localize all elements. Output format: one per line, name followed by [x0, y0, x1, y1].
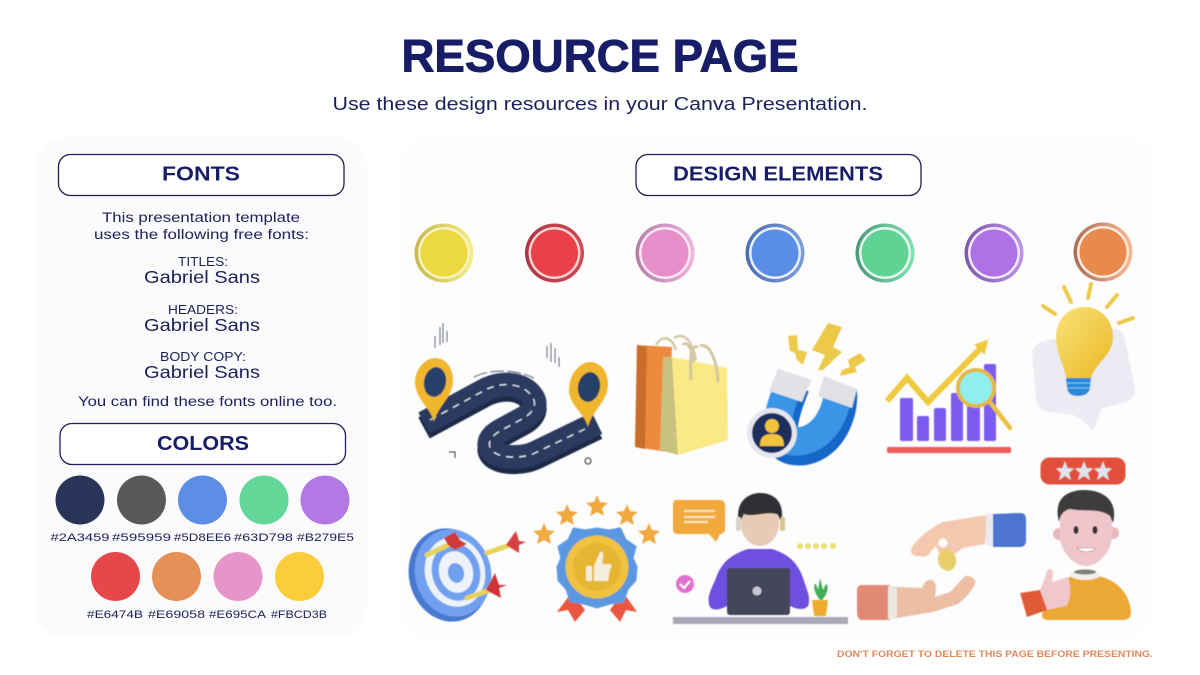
icon: bar chart with magnifier	[887, 341, 1011, 453]
text block: headers font	[144, 303, 260, 335]
text block: headers font: Gabriel Sans	[144, 315, 260, 335]
swatch labels: row two: #E6474B	[87, 609, 143, 621]
text block: body copy font	[144, 350, 260, 382]
panel: fonts and colors	[35, 137, 367, 638]
swatch labels: row one: #63D798	[234, 532, 293, 544]
icon: shopping bags	[635, 336, 728, 455]
icon: hands exchanging coin	[857, 513, 1026, 620]
icon: green button	[856, 224, 914, 282]
heading: fonts: FONTS	[162, 164, 240, 186]
text block: headers font: HEADERS:	[168, 303, 238, 317]
heading: colors	[60, 424, 346, 464]
heading: design elements: DESIGN ELEMENTS	[673, 164, 883, 186]
heading: design elements	[636, 154, 921, 196]
footer note: DON'T FORGET TO DELETE THIS PAGE BEFORE PRESENTING.	[837, 649, 1153, 659]
text block: fonts intro: uses the following free fonts:	[94, 227, 309, 242]
text block: body copy font: Gabriel Sans	[144, 362, 260, 382]
swatch labels: row two: #FBCD3B	[271, 609, 327, 621]
text block: titles font: TITLES:	[178, 255, 228, 269]
text block: fonts intro: This presentation template	[102, 210, 300, 225]
icon: winding road with map pins	[415, 323, 608, 464]
swatch labels: row two: #E695CA	[209, 609, 267, 621]
swatch labels: row one	[50, 532, 354, 544]
icon: purple button	[964, 224, 1024, 282]
icon: pink button	[636, 224, 694, 282]
swatch labels: row one: #595959	[112, 532, 171, 544]
text block: titles font	[144, 255, 260, 287]
title: RESOURCE PAGE	[402, 30, 798, 82]
swatch labels: row two	[87, 609, 327, 621]
icon: orange button	[1074, 222, 1132, 282]
text block: body copy font: BODY COPY:	[160, 350, 246, 364]
icon: target with darts	[399, 520, 526, 630]
panel: design elements	[399, 137, 1155, 638]
icon: medal with stars	[533, 495, 660, 622]
text block: titles font: Gabriel Sans	[144, 267, 260, 287]
icon: smiling man with rating	[1020, 458, 1131, 620]
heading: colors: COLORS	[157, 433, 249, 455]
text block: fonts note: You can find these fonts online too.	[78, 394, 337, 409]
icon: call centre agent at laptop	[673, 493, 848, 624]
icon: magnet with lightning and person badge	[747, 323, 866, 458]
text block: fonts intro	[94, 210, 309, 242]
swatch labels: row one: #B279E5	[297, 532, 354, 544]
icon: blue button	[746, 224, 804, 282]
icon: yellow button	[414, 224, 474, 282]
swatch labels: row one: #5D8EE6	[174, 532, 231, 544]
swatch labels: row one: #2A3459	[50, 532, 110, 544]
icon: red button	[525, 224, 584, 282]
swatch labels: row two: #E69058	[148, 609, 205, 621]
subtitle: Use these design resources in your Canva Presentation.	[332, 94, 868, 114]
icon: light bulb on speech bubble	[1032, 284, 1135, 431]
swatches: row two	[91, 552, 324, 601]
swatches: row one	[56, 476, 350, 524]
heading: fonts	[58, 154, 344, 196]
